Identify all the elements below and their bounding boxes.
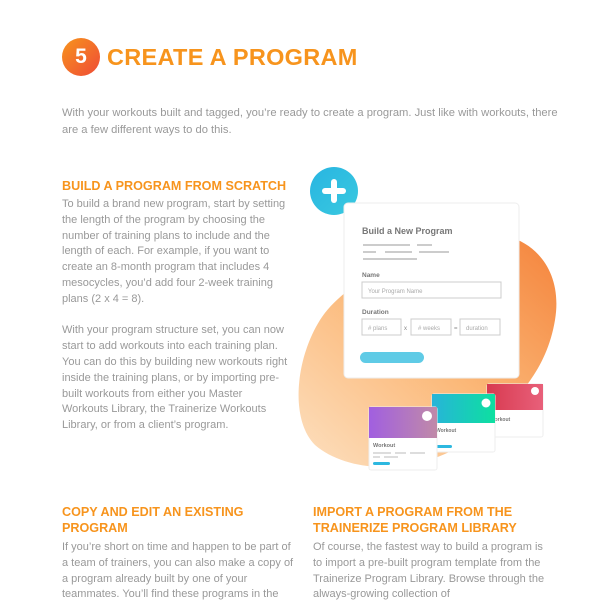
number badge: 5: [75, 45, 87, 68]
illustration: Your Program Name: [368, 289, 423, 295]
illustration: # weeks: [418, 326, 440, 332]
plus icon: [310, 167, 358, 215]
illustration: Workout: [373, 443, 395, 449]
heading: import: IMPORT A PROGRAM FROM THE TRAINERIZE PROGRAM LIBRARY: [313, 505, 517, 535]
form card: [344, 203, 519, 378]
illustration: Name: [362, 272, 380, 279]
text: import: Of course, the fastest way to build a program is to import a pre-built program template from the Trainerize Program Library. Browse through the always-growing collection of: [313, 541, 544, 600]
illustration: duration: [466, 326, 488, 332]
text: build from scratch: With your program structure set, you can now start to add workouts into each training plan. You can do this by building new workouts right inside the training plans, or by importing pre-built workouts from either you Master Workouts Library, the Trainerize Workouts Library, or from a client’s program.: [62, 324, 287, 431]
illustration: Workout: [490, 417, 511, 423]
number badge: [62, 38, 100, 76]
illustration: Build a New Program: [362, 226, 453, 236]
illustration: [298, 167, 556, 470]
illustration: Workout: [436, 428, 457, 434]
workout cards: [487, 384, 543, 437]
illustration: =: [454, 326, 458, 332]
text: copy and edit: If you’re short on time and happen to be part of a team of trainers, you can also make a copy of a program already built by one of your teammates. You’ll find these programs in the: [62, 541, 293, 600]
title: CREATE A PROGRAM: [107, 44, 358, 70]
text: build from scratch: [62, 198, 288, 431]
blob: [299, 233, 556, 467]
heading: copy and edit: COPY AND EDIT AN EXISTING PROGRAM: [62, 505, 243, 535]
illustration: Duration: [362, 309, 389, 316]
illustration: x: [404, 326, 407, 332]
intro text: With your workouts built and tagged, you’re ready to create a program. Just like with workouts, there are a few different ways to do this.: [62, 107, 558, 136]
illustration: # plans: [368, 326, 387, 332]
heading: build from scratch: BUILD A PROGRAM FROM SCRATCH: [62, 179, 286, 193]
text: build from scratch: To build a brand new program, start by setting the length of the program by choosing the number of training plans to include and the length of each. For example, if you want to create an 8-month program that includes 4 mesocycles, you’d add four 2-week training plans (2 x 4 = 8).: [62, 198, 285, 305]
